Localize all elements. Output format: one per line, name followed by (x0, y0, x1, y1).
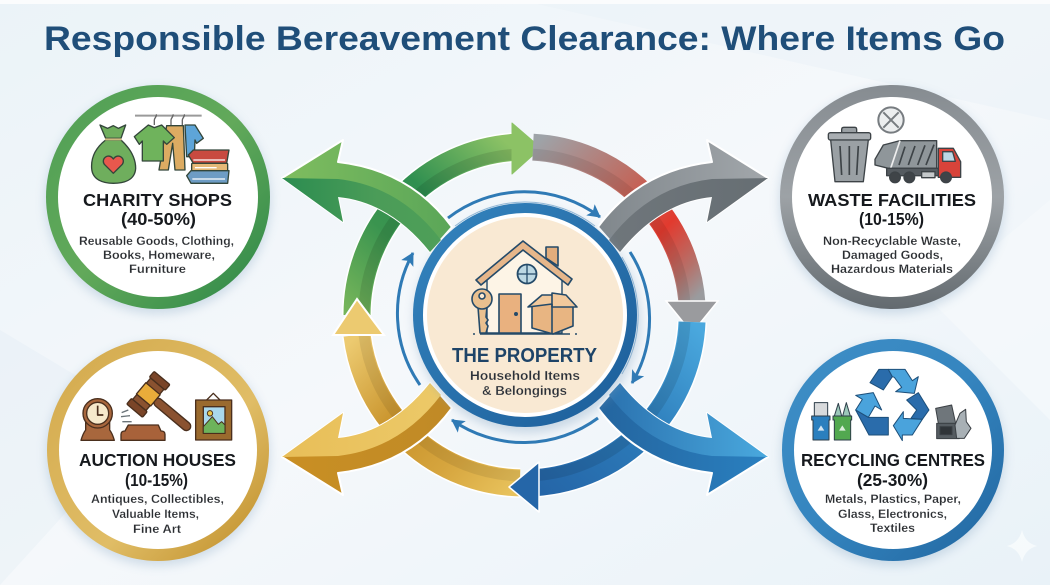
icon: no-entry symbol, bin and truck (828, 107, 961, 183)
percentage: charity shops: (40-50%) (121, 209, 196, 229)
description: charity shops: Furniture (129, 262, 186, 276)
outer arrowhead: blue (509, 462, 539, 512)
panel: charity shops (45, 85, 271, 314)
panel: the property (413, 203, 640, 433)
percentage: auction houses: (10-15%) (125, 470, 188, 490)
icon: house, key and box (472, 241, 577, 334)
cycle arrows diagram (282, 123, 768, 512)
icon: bins, recycling symbol, e-waste (812, 369, 971, 441)
heading: waste facilities: WASTE FACILITIES (808, 190, 976, 210)
heading: recycling centres: RECYCLING CENTRES (801, 450, 985, 470)
big arrow: to auction houses (282, 383, 452, 495)
big arrow: to waste facilities (598, 140, 768, 252)
description: auction houses: Antiques, Collectibles, (91, 492, 224, 506)
description: charity shops: Books, Homeware, (103, 248, 215, 262)
outer arc: green (357, 123, 541, 315)
panel: auction houses (46, 339, 270, 566)
outer arc: gold (333, 299, 520, 483)
big arrow: to recycling centres (598, 383, 768, 495)
description: auction houses: Fine Art (133, 522, 181, 536)
heading: charity shops: CHARITY SHOPS (83, 190, 232, 210)
icon: charity bag, clothes, books (92, 114, 229, 183)
title: Responsible Bereavement Clearance: Where Items Go (44, 20, 1005, 58)
outer arc: grey to red (533, 147, 718, 333)
panel: waste facilities (779, 85, 1005, 314)
icon: clock, gavel, framed picture (81, 371, 232, 445)
icon: sparkle watermark (1007, 530, 1037, 562)
description: recycling centres: Metals, Plastics, Paper, (825, 492, 961, 506)
description: auction houses: Valuable Items, (112, 507, 199, 521)
description: recycling centres: Textiles (870, 521, 915, 535)
description: waste facilities: Non-Recyclable Waste, (823, 234, 961, 248)
description: the property: Household Items (470, 368, 580, 383)
description: charity shops: Reusable Goods, Clothing, (79, 234, 234, 248)
label: the property: THE PROPERTY (452, 345, 598, 367)
percentage: recycling centres: (25-30%) (857, 470, 928, 490)
description: the property: & Belongings (482, 383, 567, 398)
percentage: waste facilities: (10-15%) (859, 209, 924, 229)
description: waste facilities: Damaged Goods, (842, 248, 943, 262)
outer arc: blue (536, 322, 692, 483)
thin circular arrows (397, 192, 650, 443)
description: recycling centres: Glass, Electronics, (838, 507, 947, 521)
description: waste facilities: Hazardous Materials (831, 262, 953, 276)
panel: recycling centres (781, 339, 1005, 566)
big arrow: to charity shops (282, 140, 452, 252)
heading: auction houses: AUCTION HOUSES (79, 450, 236, 470)
